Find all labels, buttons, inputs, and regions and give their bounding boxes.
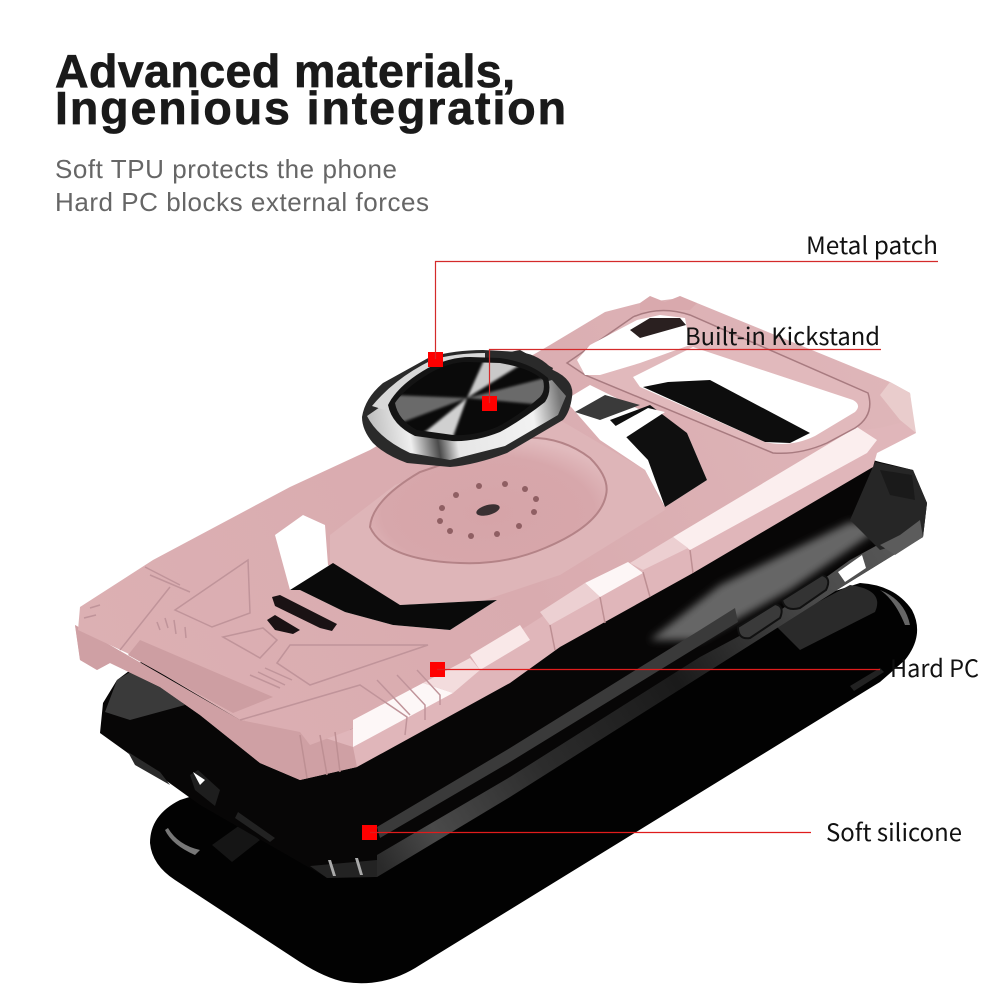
vent slots bbox=[272, 595, 337, 631]
phone mesh grille bbox=[775, 585, 877, 650]
panel ridge lines bbox=[84, 560, 440, 735]
callout: built-in kickstand bbox=[482, 317, 881, 411]
hard PC leader bbox=[437, 668, 880, 670]
metal patch leader bbox=[436, 262, 938, 359]
soft TPU layer bbox=[100, 440, 927, 878]
callout: metal patch bbox=[428, 226, 938, 367]
left side shade bbox=[75, 625, 357, 780]
ring inner recess bbox=[388, 357, 549, 441]
hard PC label: Hard PC bbox=[890, 649, 979, 684]
ring top highlight bbox=[372, 353, 485, 410]
title: Advanced materials, bbox=[55, 45, 515, 97]
components in middle cutout bbox=[610, 405, 707, 507]
hard PC marker bbox=[430, 662, 445, 677]
camera hole small bbox=[577, 315, 690, 375]
title: Ingenious integration bbox=[55, 82, 566, 134]
camera frame bbox=[567, 310, 870, 453]
bevel highlights along front edge bbox=[353, 427, 877, 747]
black seen through small hole bbox=[630, 318, 686, 338]
ring polished face bbox=[367, 380, 566, 460]
TPU front corner grey bbox=[310, 860, 377, 878]
volume button plus bbox=[782, 575, 828, 609]
PC shell top face bbox=[78, 299, 913, 745]
kickstand leader bbox=[490, 350, 881, 403]
camera hole large bbox=[633, 347, 858, 444]
title bbox=[55, 45, 566, 134]
TPU right bumper bbox=[850, 462, 927, 550]
phone body bbox=[150, 583, 917, 983]
phone port shade bbox=[212, 825, 260, 862]
soft silicone leader bbox=[370, 832, 811, 834]
phone side slit bbox=[850, 668, 884, 691]
callout: hard PC bbox=[430, 649, 979, 684]
soft silicone marker bbox=[362, 825, 377, 840]
black TPU seen through large hole bbox=[643, 380, 810, 443]
brushed metal disc bbox=[395, 362, 544, 435]
phone lower-left highlight bbox=[165, 828, 200, 855]
TPU left bumper bbox=[105, 672, 185, 720]
volume button minus bbox=[738, 604, 782, 638]
lower cutout bbox=[275, 515, 497, 630]
PC shell side faces bbox=[75, 395, 916, 780]
black seen through lower cutout bbox=[290, 563, 497, 630]
corner ribs top bbox=[640, 296, 697, 310]
subtitle bbox=[55, 154, 429, 217]
grey piece in middle cutout bbox=[575, 395, 640, 420]
back plate octagon bbox=[330, 420, 665, 605]
raised side block bbox=[128, 640, 273, 713]
kickstand marker bbox=[482, 396, 497, 411]
ring hinge bbox=[490, 350, 553, 378]
kickstand label: Built-in Kickstand bbox=[685, 317, 880, 352]
subtitle: Hard PC blocks external forces bbox=[55, 187, 429, 217]
side opening bbox=[838, 555, 866, 582]
subtitle: Soft TPU protects the phone bbox=[55, 154, 397, 184]
exploded phone case illustration bbox=[75, 296, 927, 983]
side segment seams bbox=[300, 550, 693, 778]
recess center hole bbox=[475, 502, 501, 518]
callout: soft silicone bbox=[362, 813, 962, 848]
middle cutout bbox=[565, 385, 707, 507]
recess dots bbox=[437, 481, 539, 539]
hard PC shell bbox=[75, 296, 916, 780]
ring outer bbox=[362, 350, 572, 467]
TPU lower strip bbox=[377, 522, 923, 877]
bottom port openings bbox=[128, 752, 170, 785]
metal patch marker bbox=[428, 352, 443, 367]
metal patch label: Metal patch bbox=[806, 226, 938, 261]
metal ring kickstand bbox=[362, 350, 572, 467]
phone edge highlight bbox=[880, 590, 910, 625]
soft grey glow bbox=[650, 522, 885, 640]
white swoosh in middle cutout bbox=[612, 408, 665, 440]
soft silicone label: Soft silicone bbox=[826, 813, 962, 848]
circular recess bbox=[370, 438, 607, 563]
TPU upper strip bbox=[377, 608, 738, 838]
